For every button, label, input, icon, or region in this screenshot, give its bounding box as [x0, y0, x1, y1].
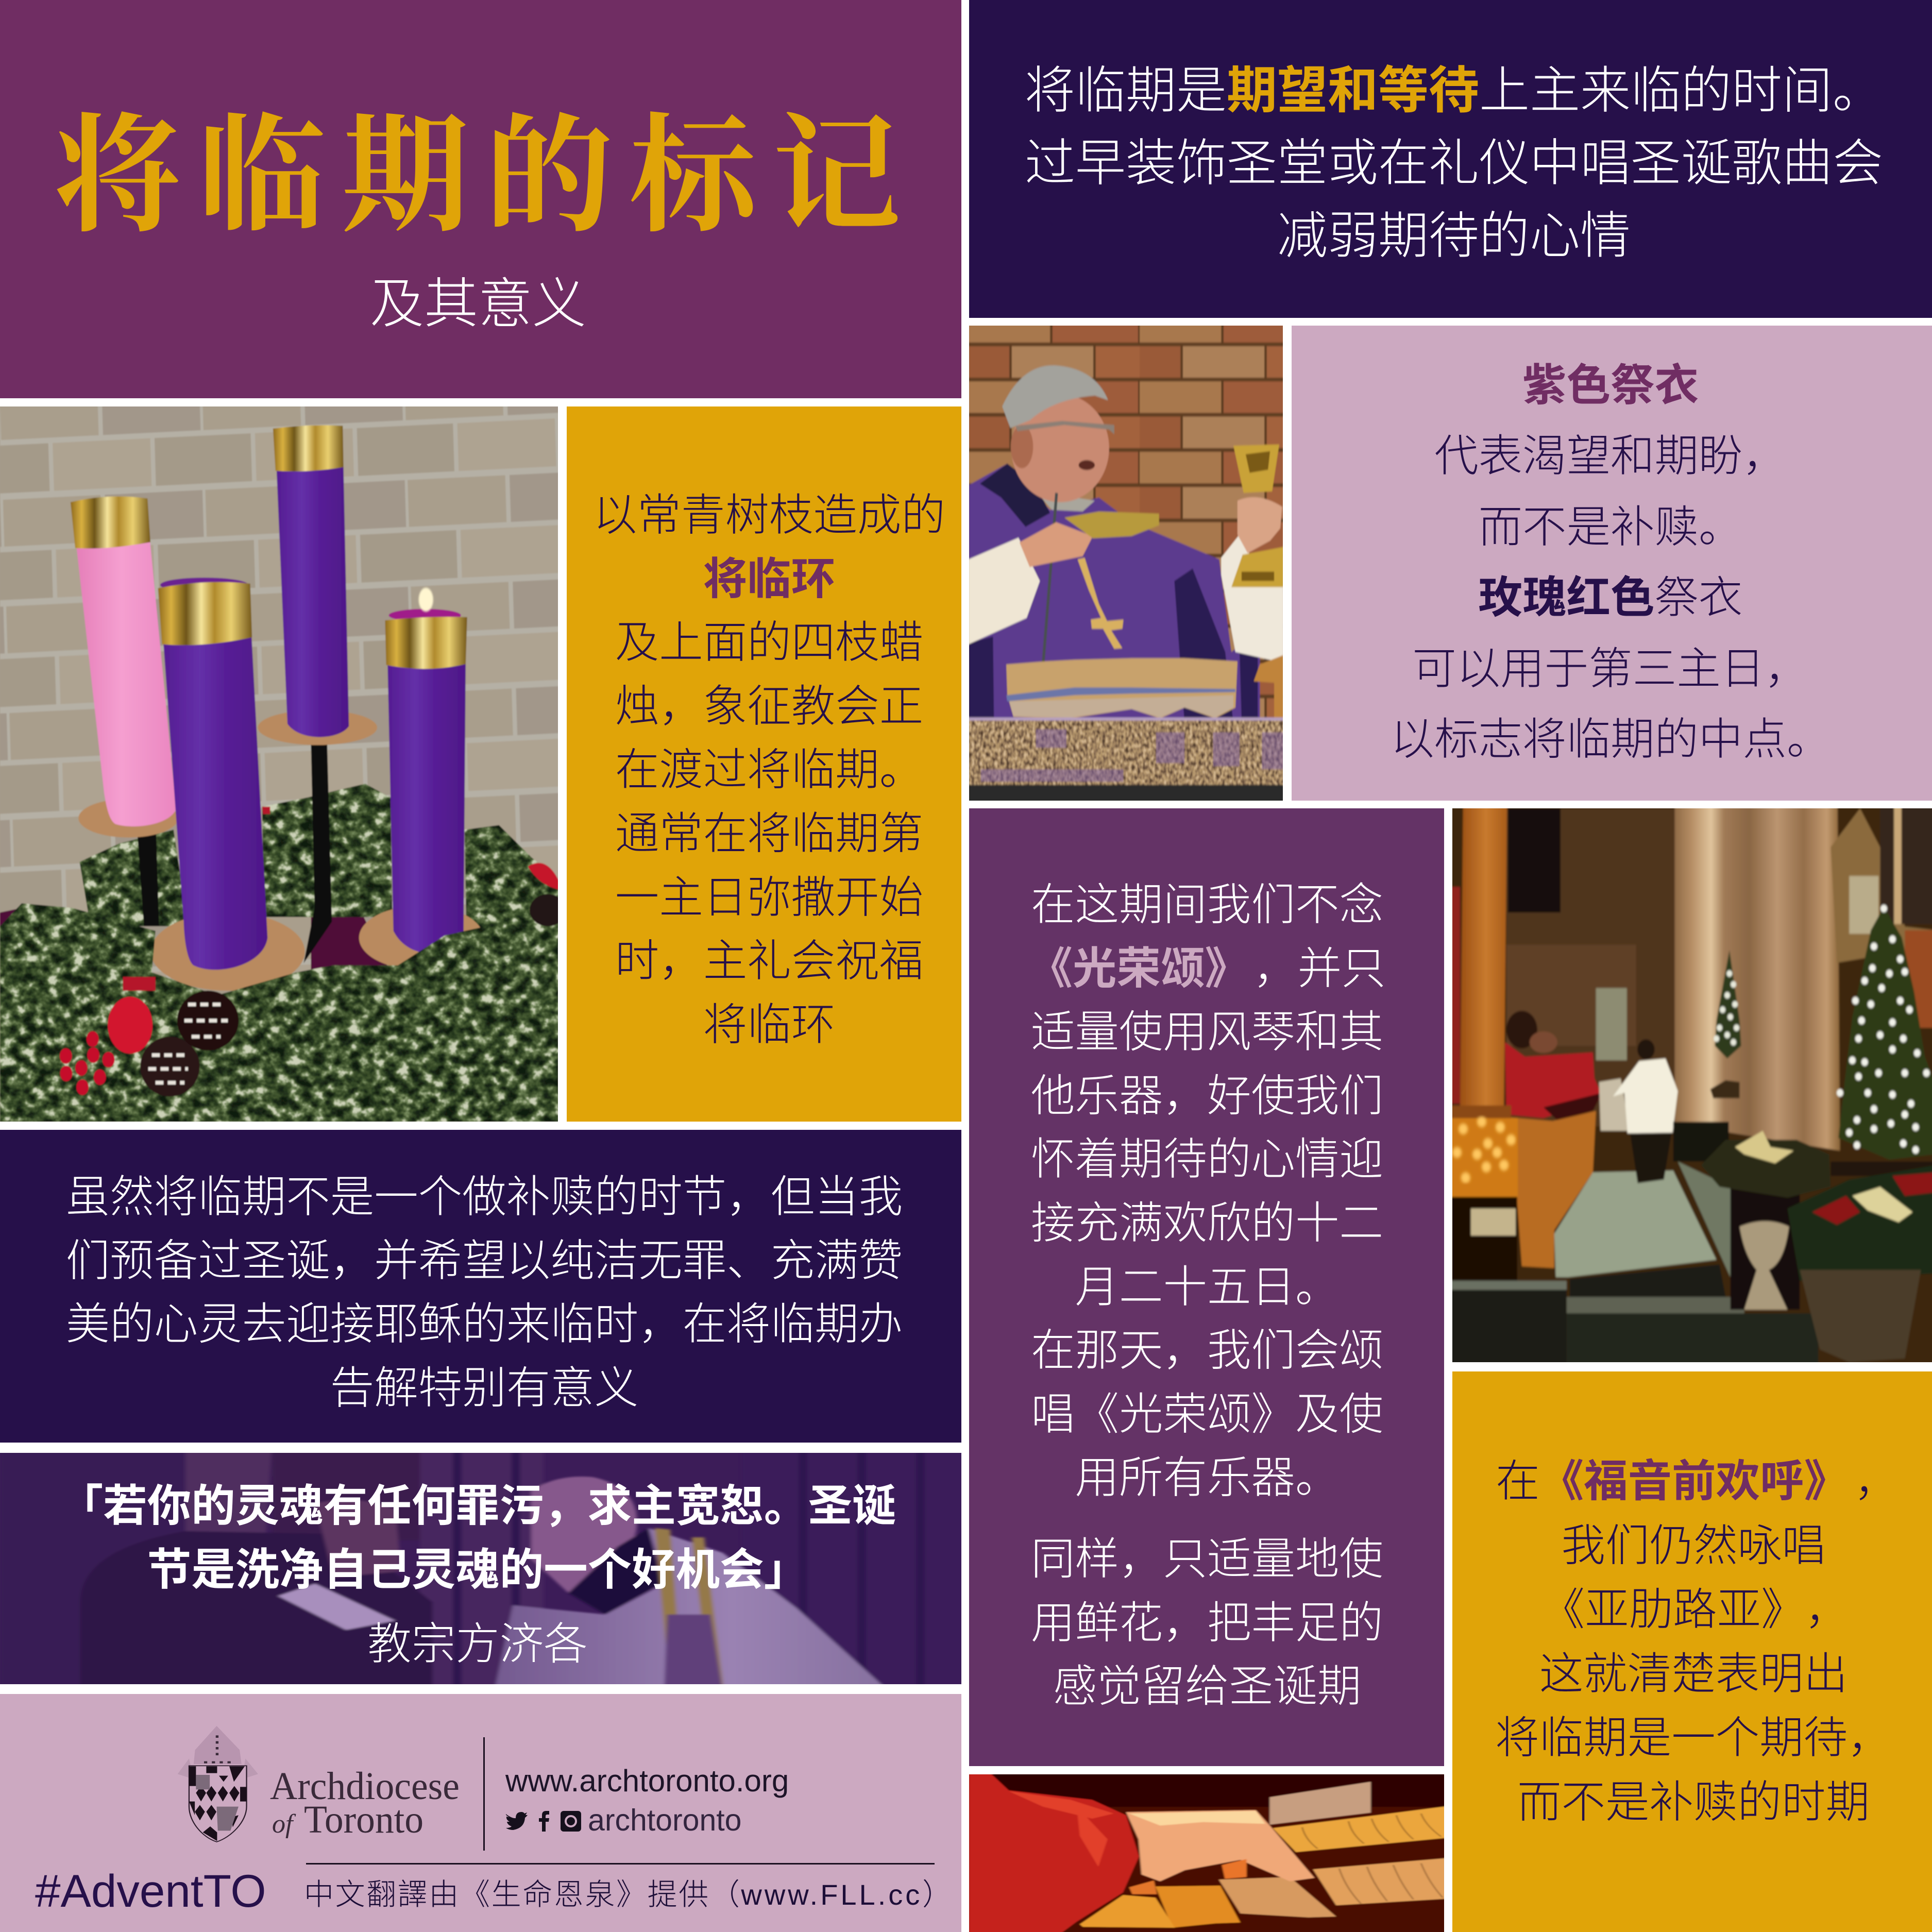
paten: [1064, 512, 1159, 538]
alleluia text: 在《福音前欢呼》 ，: [1496, 1457, 1899, 1506]
panel: title: [0, 0, 961, 398]
gloria text: 月二十五日。: [1075, 1263, 1340, 1312]
alleluia text: 将临期是一个期待，: [1495, 1714, 1892, 1762]
flowers text: [1031, 1535, 1383, 1711]
photo: celebrant in purple vestments: [969, 326, 1283, 801]
wreath text: 在渡过将临期。: [615, 745, 923, 794]
vestment text: 而不是补赎。: [1479, 503, 1742, 552]
subtitle: 及其意义: [370, 274, 586, 334]
wreath text: 及上面的四枝蜡: [615, 618, 923, 667]
wooden choir stall: [1511, 1111, 1596, 1268]
photo: cathedral aisle at christmas: [1452, 808, 1932, 1362]
intro text: 过早装饰圣堂或在礼仪中唱圣诞歌曲会: [1025, 134, 1883, 191]
alleluia text: [1452, 1450, 1932, 1835]
left pillar: [1460, 804, 1507, 1107]
panel: wreath explanation: [567, 406, 961, 1122]
confession text: 美的心灵去迎接耶稣的来临时，在将临期办: [66, 1300, 903, 1349]
purple candle front: [158, 578, 267, 970]
brick wall: [0, 397, 564, 1129]
gloria text: [1028, 880, 1386, 1502]
hand: [1126, 1810, 1314, 1894]
gloria text: 怀着期待的心情迎: [1031, 1135, 1383, 1184]
altar server: [1613, 1039, 1678, 1183]
red sleeve: [969, 1767, 1139, 1932]
confession text: 们预备过圣诞，并希望以纯洁无罪、充满赞: [66, 1236, 903, 1285]
pectoral cross: [1078, 558, 1124, 649]
wreath text: 以常青树枝造成的: [593, 491, 945, 540]
confession text: 虽然将临期不是一个做补赎的时节，但当我: [66, 1173, 903, 1222]
purple table cloth: [0, 908, 391, 1122]
social handle: archtoronto: [588, 1803, 741, 1837]
quote attribution: 教宗方济各: [367, 1620, 588, 1669]
dark organ case: [969, 1767, 1450, 1932]
flowers text: 感觉留给圣诞期: [1053, 1662, 1361, 1711]
steps: [1448, 1264, 1818, 1367]
alleluia text: 而不是补赎的时期: [1517, 1778, 1870, 1827]
altar table behind: [1599, 1078, 1630, 1131]
flowers text: 同样，只适量地使: [1031, 1535, 1383, 1584]
pink candle: [71, 496, 176, 826]
panel: dark confession note: [0, 1130, 961, 1443]
vestment text: 可以用于第三主日，: [1412, 645, 1809, 693]
small christmas tree: [1710, 950, 1741, 1098]
photo: advent wreath candles: [0, 406, 558, 1122]
wreath text: 时，主礼会祝福: [615, 937, 923, 986]
logo: archdiocese name: Archdiocese: [270, 1765, 460, 1808]
panel: pope francis quote: [0, 1453, 961, 1684]
confession text: 告解特别有意义: [330, 1364, 638, 1413]
raised platform and urn: [1673, 1122, 1800, 1310]
wreath text: 将临环: [703, 555, 835, 604]
apples and berries: [66, 807, 558, 1087]
wreath text: 烛，象征教会正: [615, 682, 923, 731]
vigil candles: [1448, 1106, 1518, 1197]
greenery behind candles: [79, 783, 558, 929]
gloria text: 用所有乐器。: [1075, 1453, 1340, 1502]
name plate: [1270, 1782, 1371, 1825]
panel: alleluia: [1452, 1371, 1932, 1932]
vestment text: 紫色祭衣: [1522, 361, 1699, 410]
wreath text: 将临环: [703, 1001, 835, 1049]
background painting: confession: [79, 1453, 924, 1684]
confession text: [66, 1173, 903, 1413]
upper manual keys: [1273, 1806, 1450, 1852]
chalice: [1231, 445, 1283, 587]
logo: archdiocese name: [270, 1765, 460, 1841]
vestment text: 玫瑰红色祭衣: [1479, 573, 1742, 622]
gold book: [1254, 655, 1283, 720]
icon: social media: [506, 1811, 581, 1832]
hashtag: #AdventTO: [35, 1865, 266, 1917]
head: [1002, 365, 1114, 502]
large christmas tree: [1838, 907, 1932, 1160]
panel: gloria and music: [969, 808, 1444, 1766]
altar cloth: [969, 718, 1286, 806]
photo: organist hand on keys: [969, 1774, 1444, 1932]
copper discs: [78, 710, 483, 991]
intro text: 减弱期待的心情: [1277, 207, 1631, 264]
gloria text: 在那天，我们会颂: [1031, 1326, 1383, 1375]
choir in red: [1448, 887, 1604, 1122]
brick wall: [969, 325, 1286, 806]
carpet aisle: [1554, 1171, 1717, 1277]
alleluia text: 我们仍然咏唱: [1561, 1521, 1826, 1570]
lit purple candle: [385, 588, 467, 953]
rule: [306, 1863, 935, 1865]
white collar: [1036, 492, 1095, 512]
panel: vestment colours: [1292, 326, 1932, 801]
quote text: 「若你的灵魂有任何罪污，求主宽恕。圣诞: [59, 1482, 896, 1531]
quote text: [59, 1482, 896, 1595]
intro text: [1025, 62, 1883, 264]
logo: archdiocese name: Toronto: [304, 1798, 423, 1841]
lower manual keys: [1080, 1858, 1450, 1928]
wreath text: [593, 491, 945, 1049]
central columns: [1675, 804, 1840, 1150]
gloria text: 他乐器，好使我们: [1031, 1072, 1383, 1121]
vestment text: [1390, 361, 1831, 764]
translation credit: 中文翻譯由《生命恩泉》提供（www.FLL.cc）: [304, 1878, 954, 1911]
gloria text: 在这期间我们不念: [1031, 880, 1383, 929]
logo: archdiocese name: of: [272, 1809, 296, 1839]
vestment text: 以标志将临期的中点。: [1390, 715, 1831, 764]
panel: footer credits: [0, 1694, 961, 1932]
pine cones: [140, 894, 566, 1096]
logo: archdiocese coat of arms: [178, 1726, 258, 1842]
wreath text: 通常在将临期第: [615, 809, 923, 858]
sign and dark stand: [1448, 1197, 1517, 1288]
vestment text: 代表渴望和期盼，: [1434, 432, 1787, 481]
wreath text: 一主日弥撒开始: [615, 873, 923, 922]
alleluia text: 《亚肋路亚》 ，: [1541, 1585, 1849, 1634]
wreath foreground: [0, 899, 558, 1122]
gloria text: 接充满欢欣的十二: [1031, 1199, 1383, 1248]
flower arrangement: [1701, 1131, 1831, 1198]
intro text: 将临期是期望和等待上主来临的时间。: [1025, 62, 1883, 118]
right sleeve: [1221, 535, 1283, 663]
chasuble: [969, 464, 1260, 723]
title heading: 将临期的标记: [54, 106, 917, 248]
potted poinsettias: [1787, 1161, 1932, 1362]
microphone: [1039, 493, 1057, 718]
row of ciboria: [1006, 658, 1238, 718]
memorial alcove: [1831, 804, 1932, 1028]
left sleeve and hand: [969, 522, 1093, 644]
gloria text: 唱《光荣颂》及使: [1031, 1390, 1383, 1439]
flowers text: 用鲜花，把丰足的: [1031, 1599, 1383, 1648]
purple candle back: [273, 425, 349, 737]
gloria text: 《光荣颂》 ，并只: [1028, 944, 1386, 993]
website: www.archtoronto.org: [505, 1764, 789, 1798]
panel: intro statement: [969, 0, 1932, 318]
gloria text: 适量使用风琴和其: [1031, 1008, 1383, 1057]
alleluia text: 这就清楚表明出: [1539, 1650, 1848, 1699]
quote text: 节是洗净自己灵魂的一个好机会」: [147, 1546, 808, 1595]
dark back wall: [1448, 804, 1932, 1367]
candle stand posts: [138, 744, 332, 963]
divider: [483, 1737, 485, 1851]
